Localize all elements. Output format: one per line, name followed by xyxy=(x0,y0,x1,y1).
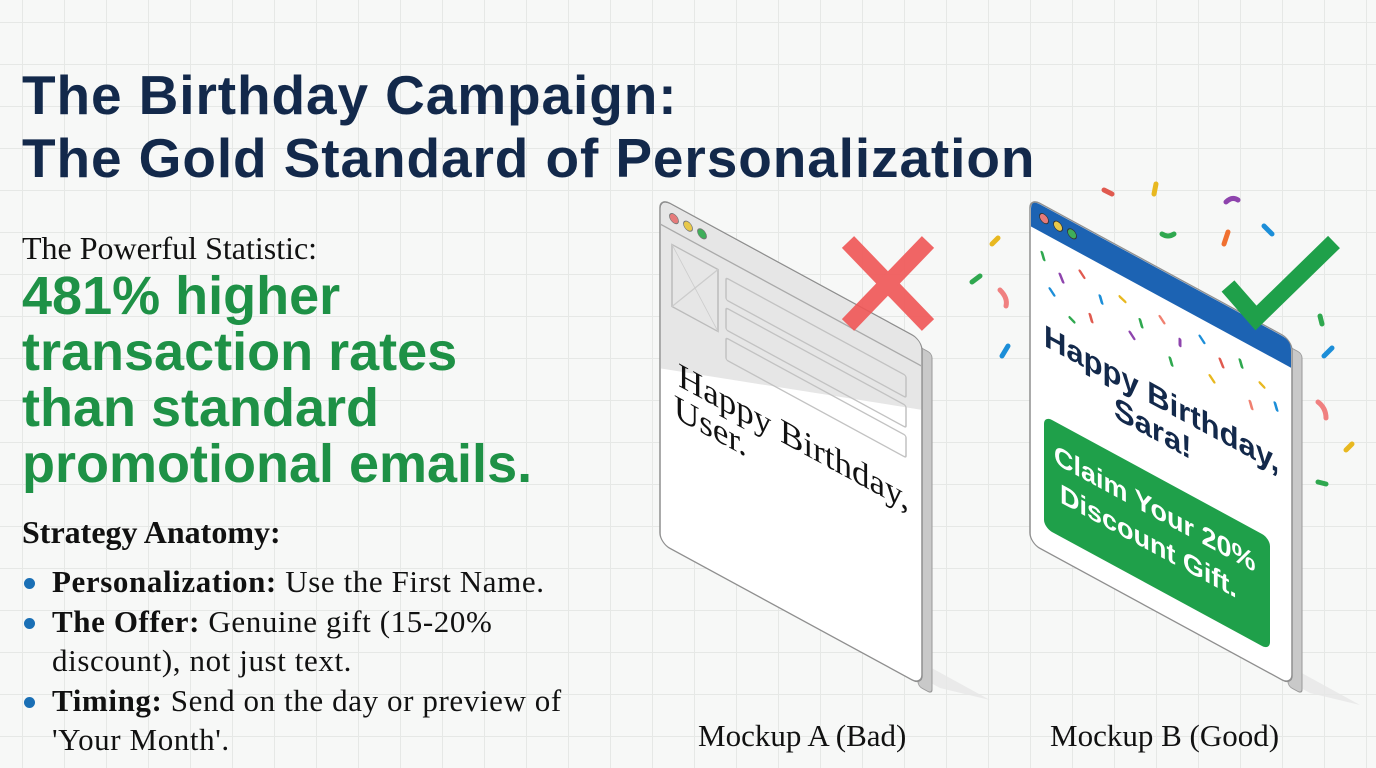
statistic headline: 481% higher xyxy=(22,266,340,326)
text: Happy Birthday, User.: Happy Birthday, xyxy=(678,356,909,520)
mockup A: bad email xyxy=(660,198,990,700)
strategy bullet list: Timing: Send on the day or preview of xyxy=(52,683,562,718)
confetti xyxy=(972,184,1352,484)
button: claim discount xyxy=(1044,416,1270,650)
strategy bullet list: 'Your Month'. xyxy=(52,722,230,757)
statistic headline: transaction rates xyxy=(22,322,457,382)
title: The Birthday Campaign: xyxy=(22,64,677,126)
statistic label: The Powerful Statistic: xyxy=(22,230,317,266)
label: mockup B: Mockup B (Good) xyxy=(1050,718,1279,753)
label: mockup A: Mockup A (Bad) xyxy=(698,718,906,753)
title xyxy=(22,64,1035,189)
mockup B: good email: Sara! xyxy=(1114,391,1192,467)
icon: green check xyxy=(1228,242,1334,318)
strategy bullet list: Personalization: Use the First Name. xyxy=(52,564,545,599)
text: Happy Birthday, Sara!: Happy Birthday, xyxy=(1044,319,1279,481)
icon: red X xyxy=(848,242,928,325)
mockup B: good email xyxy=(1030,198,1360,705)
mockup B: good email: Claim Your 20% xyxy=(1054,440,1255,579)
title: The Gold Standard of Personalization xyxy=(22,127,1035,189)
strategy bullet list xyxy=(24,564,562,757)
statistic headline: than standard xyxy=(22,378,379,438)
mockup A: bad email: User. xyxy=(674,388,747,466)
mockup B: good email: Discount Gift. xyxy=(1060,479,1237,605)
statistic headline xyxy=(22,266,532,494)
statistic headline: promotional emails. xyxy=(22,434,532,494)
strategy bullet list: discount), not just text. xyxy=(52,643,352,678)
strategy heading: Strategy Anatomy: xyxy=(22,514,281,550)
strategy bullet list: The Offer: Genuine gift (15-20% xyxy=(52,604,492,639)
